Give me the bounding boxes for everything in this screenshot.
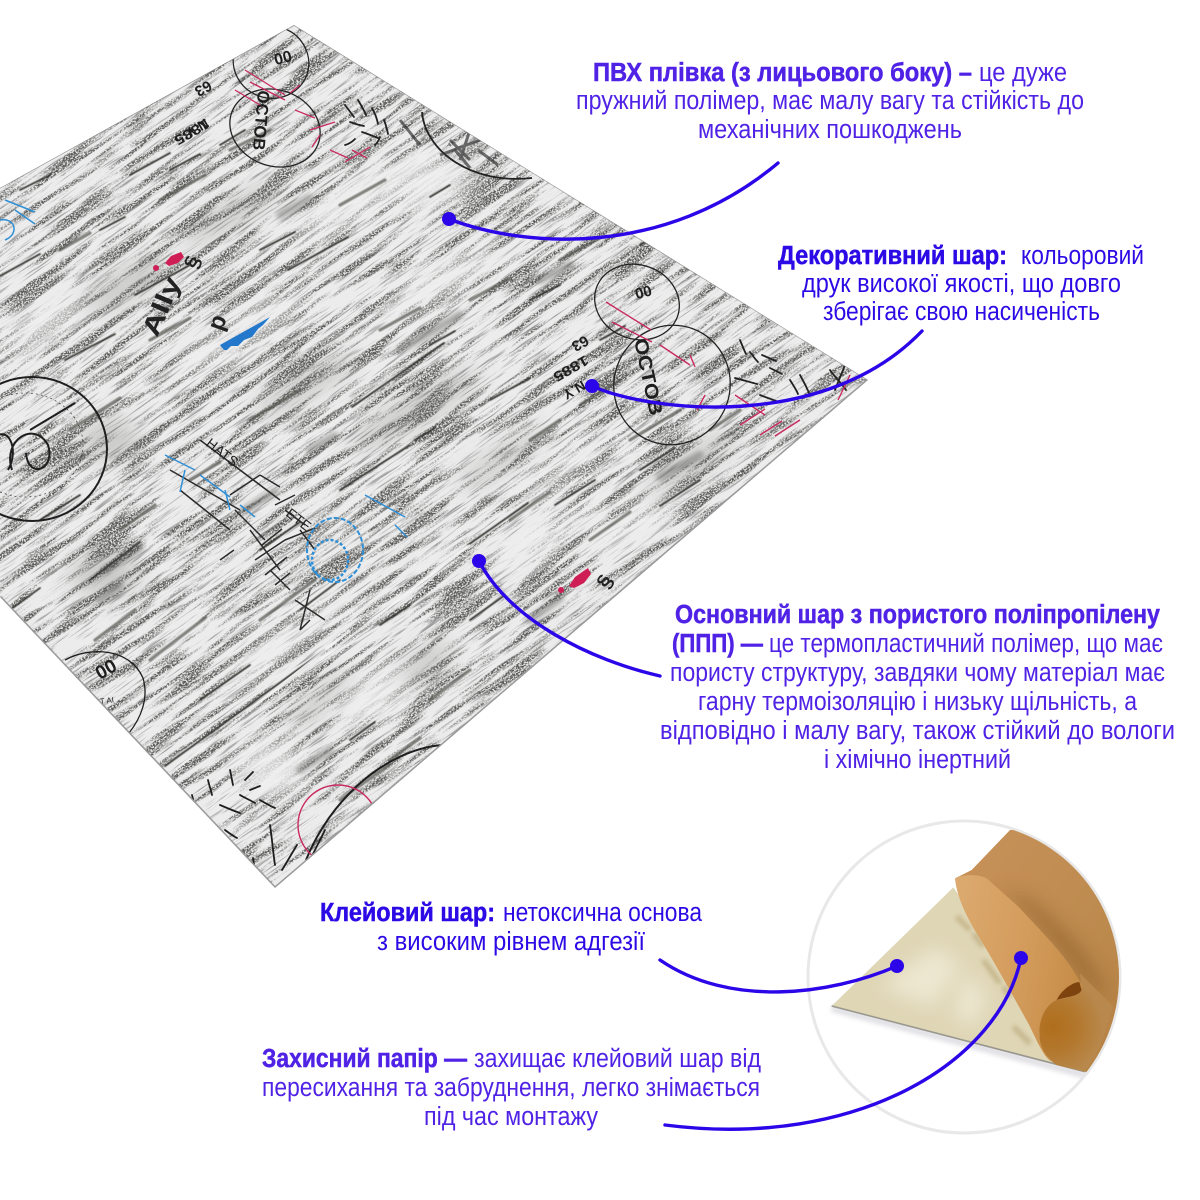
text block: core layer: і хімічно інертний [824, 746, 1011, 774]
text block: protective paper: під час монтажу [424, 1103, 598, 1131]
wall panel sample [0, 25, 868, 888]
text block: core layer: Основний шар з пористого поліпропілену [675, 601, 1161, 629]
text block: protective paper [262, 1045, 761, 1131]
curl inner lip [1057, 982, 1082, 1000]
curl underside [1039, 973, 1113, 1072]
connector: PVC film [442, 163, 778, 239]
inset circle: peeled paper [808, 821, 1153, 1133]
light and grey patches [0, 135, 743, 800]
text block: core layer [660, 601, 1175, 774]
wall panel sample: 00 [92, 656, 121, 684]
text block: adhesive layer: Клейовий шар: [320, 899, 495, 927]
text block: core layer: відповідно і малу вагу, також стійкий до вологи [660, 717, 1175, 745]
text block: PVC film: це дуже [979, 59, 1067, 87]
print: Ally: § [180, 253, 206, 272]
adhesive layer [832, 888, 1054, 1063]
shadow beside flap [1011, 892, 1107, 996]
print: Ally: p [202, 311, 233, 334]
shadow under sheet [832, 1008, 1085, 1075]
stamp: half circle with tower [422, 112, 532, 179]
stamp group: lower right [584, 253, 846, 461]
script text and blue stamp [170, 440, 325, 630]
connector: protective paper [665, 951, 1028, 1129]
text block: PVC film [576, 59, 1084, 144]
wall panel sample: OCTOB [249, 90, 273, 151]
connector: decorative layer [585, 331, 922, 407]
wall panel sample: 00 [633, 281, 653, 302]
print: Ally [137, 253, 618, 593]
wall panel sample: ETE [283, 505, 314, 534]
print: Ally: Ally [137, 272, 187, 340]
text block: decorative layer [778, 242, 1144, 326]
wall panel sample: 1885 [171, 116, 212, 149]
wall panel sample: 00 [272, 46, 293, 67]
wall panel sample: 63 [192, 77, 215, 100]
backing paper [955, 830, 1119, 1072]
print: Ally: § [592, 571, 618, 592]
pink marks [153, 252, 591, 593]
text block: adhesive layer: з високим рівнем адгезії [377, 928, 645, 956]
text block: protective paper: Захисний папір — [262, 1045, 467, 1073]
blue triangle mark [220, 317, 270, 350]
text block: PVC film: ПВХ плівка (з лицьового боку) – [593, 59, 972, 87]
text block: PVC film: механічних пошкоджень [698, 116, 962, 144]
dark streaks [0, 130, 700, 766]
text block: core layer: гарну термоізоляцію і низьку щільність, а [698, 688, 1138, 716]
paper sheet cut to circle [830, 830, 1119, 1078]
wall panel sample: 63 [569, 332, 592, 355]
connector: adhesive layer [660, 959, 904, 992]
wall panel sample: OCTOB [629, 337, 666, 417]
text block: protective paper: захищає клейовий шар від [474, 1045, 761, 1073]
text block: PVC film: пружний полімер, має малу вагу та стійкість до [576, 87, 1084, 115]
text block: protective paper: пересихання та забруднення, легко знімається [262, 1074, 760, 1102]
wall panel sample: N.Y [560, 377, 589, 403]
wall panel sample: 1885 [550, 352, 592, 385]
wall panel sample: ET AI [94, 695, 115, 707]
large circular stamp left [0, 377, 107, 521]
panel edges [0, 380, 868, 888]
wall panel sample: HATS [203, 435, 242, 470]
wall panel sample: N.Y [183, 115, 211, 141]
text block: adhesive layer [320, 899, 703, 956]
text block: decorative layer: зберігає свою насиченість [823, 298, 1100, 326]
connector: core layer [472, 554, 660, 676]
text block: decorative layer: друк високої якості, що довго [802, 270, 1121, 298]
crease [169, 544, 470, 775]
peeled flap [955, 875, 1082, 1062]
pink stamp scribbles [235, 70, 370, 162]
bottom stamp [65, 652, 442, 878]
text block: decorative layer: кольоровий [1021, 242, 1144, 270]
text block: core layer: (ППП) — [672, 630, 763, 658]
text block: decorative layer: Декоративний шар: [778, 242, 1007, 270]
stamp group: top [219, 15, 532, 179]
wood grain texture [0, 25, 868, 882]
text block: adhesive layer: нетоксична основа [503, 899, 703, 927]
